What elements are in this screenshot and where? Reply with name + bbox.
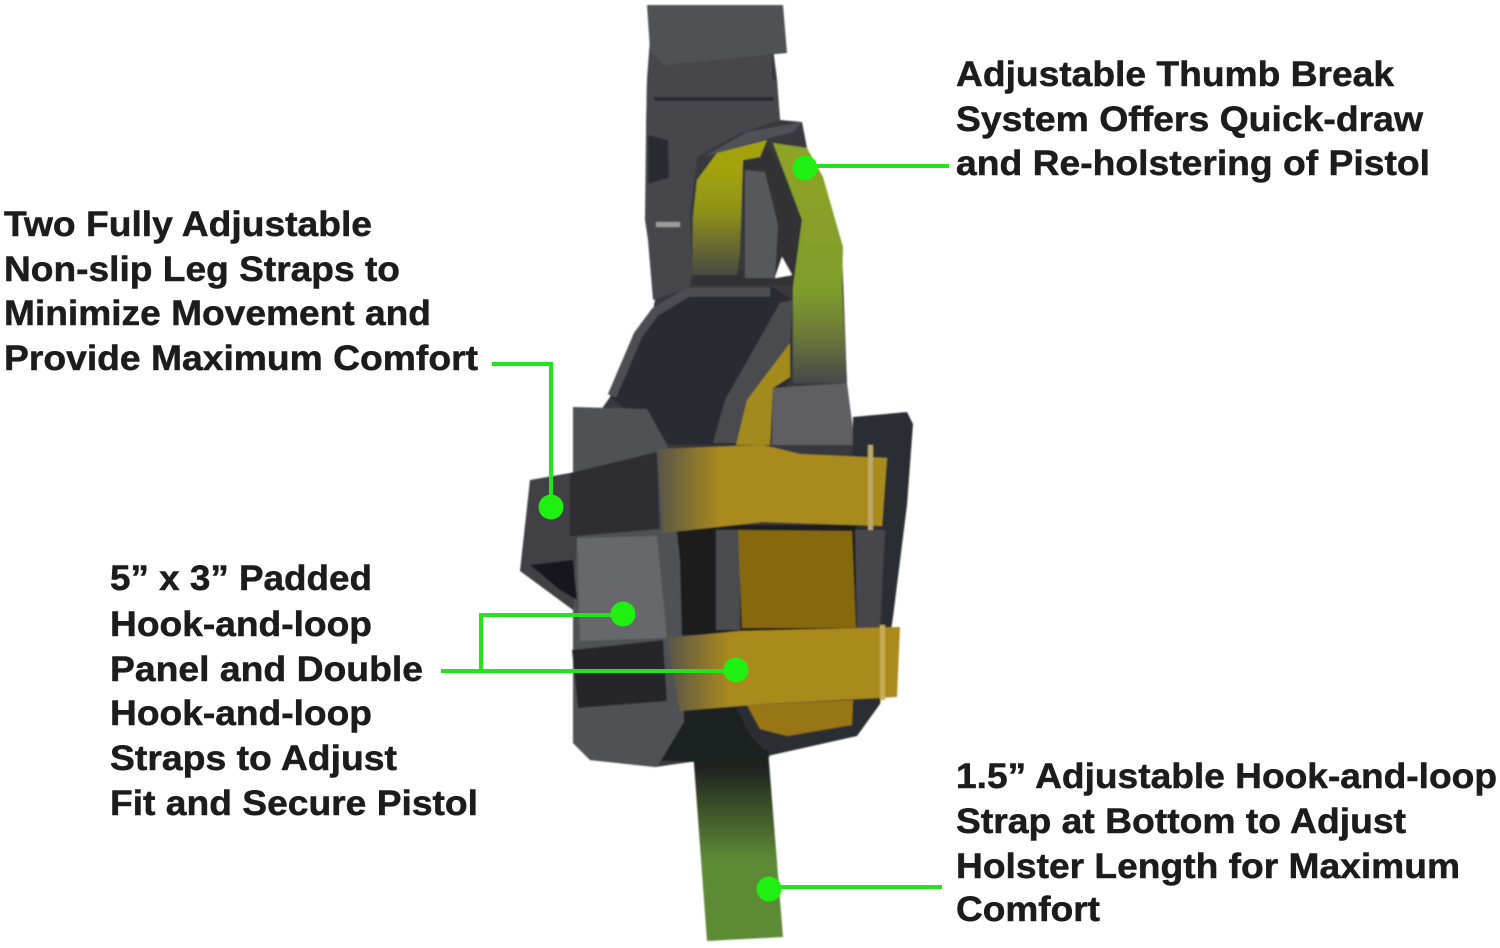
- velcro upper strap: [570, 452, 660, 536]
- right thumb strap: [773, 143, 847, 383]
- left pad panel: [573, 407, 684, 767]
- holster dark body: [610, 287, 793, 445]
- text: padded panel: [110, 559, 478, 823]
- text: padded panel: Hook-and-loop: [110, 605, 372, 644]
- thumb break mechanism: [692, 145, 802, 285]
- side binding: [713, 300, 793, 443]
- callout: bottom strap leader: [756, 876, 942, 902]
- text: bottom strap: Strap at Bottom to Adjust: [956, 802, 1406, 841]
- padded hook-and-loop panel: [577, 536, 667, 641]
- upper strap ring: [868, 445, 873, 530]
- text: leg straps: Non-slip Leg Straps to: [4, 250, 400, 289]
- text: bottom strap: Comfort: [956, 890, 1100, 929]
- text: bottom strap: Holster Length for Maximum: [956, 847, 1460, 886]
- text: padded panel: Hook-and-loop: [110, 694, 372, 733]
- lower hook-and-loop velcro: [572, 640, 667, 708]
- left thumb strap: [692, 140, 767, 275]
- text: padded panel: 5” x 3” Padded: [110, 559, 372, 598]
- text: leg straps: [4, 205, 478, 378]
- yellow back panel: [738, 530, 856, 628]
- top belt strap: [647, 5, 787, 65]
- text: thumb break: Adjustable Thumb Break: [956, 55, 1395, 94]
- text: leg straps: Two Fully Adjustable: [4, 205, 372, 244]
- text: padded panel: Straps to Adjust: [110, 739, 397, 778]
- central back: [677, 525, 857, 635]
- grey strap end: [772, 383, 855, 445]
- lower yellow panel: [747, 700, 853, 736]
- right rear panel: [730, 412, 913, 757]
- text: padded panel: Panel and Double: [110, 650, 423, 689]
- metal pin: [656, 222, 680, 227]
- text: bottom strap: 1.5” Adjustable Hook-and-loop: [956, 757, 1497, 796]
- text: thumb break: [956, 55, 1430, 183]
- bottom strap: [693, 750, 783, 941]
- text: bottom strap: [956, 757, 1497, 929]
- mechanism lighter plate: [745, 170, 778, 278]
- top flap: [703, 122, 802, 157]
- mechanism gap: [775, 257, 792, 278]
- yellow cover patch: [736, 343, 790, 445]
- central grey: [716, 530, 740, 630]
- callout: leg strap leader: [492, 364, 564, 520]
- text: leg straps: Provide Maximum Comfort: [4, 339, 478, 378]
- backing silhouette: [573, 40, 853, 767]
- right grey: [855, 530, 885, 630]
- lower strap ring: [880, 625, 885, 700]
- strap under loop: [530, 560, 577, 600]
- text: thumb break: System Offers Quick-draw: [956, 100, 1424, 139]
- holster photo: [520, 5, 913, 941]
- buckle seam: [654, 97, 774, 101]
- callout: padded panel double leader: [441, 602, 748, 682]
- text: thumb break: and Re-holstering of Pistol: [956, 144, 1430, 183]
- lower body dark: [655, 700, 770, 762]
- text: padded panel: Fit and Secure Pistol: [110, 784, 478, 823]
- lower yellow strap: [667, 627, 900, 711]
- buckle slot: [648, 135, 669, 184]
- left rear wrap strap: [520, 473, 577, 610]
- buckle: [645, 40, 780, 300]
- text: leg straps: Minimize Movement and: [4, 294, 431, 333]
- body edge binding: [612, 292, 770, 396]
- callout: thumb break leader: [792, 156, 949, 180]
- upper yellow strap: [657, 445, 887, 533]
